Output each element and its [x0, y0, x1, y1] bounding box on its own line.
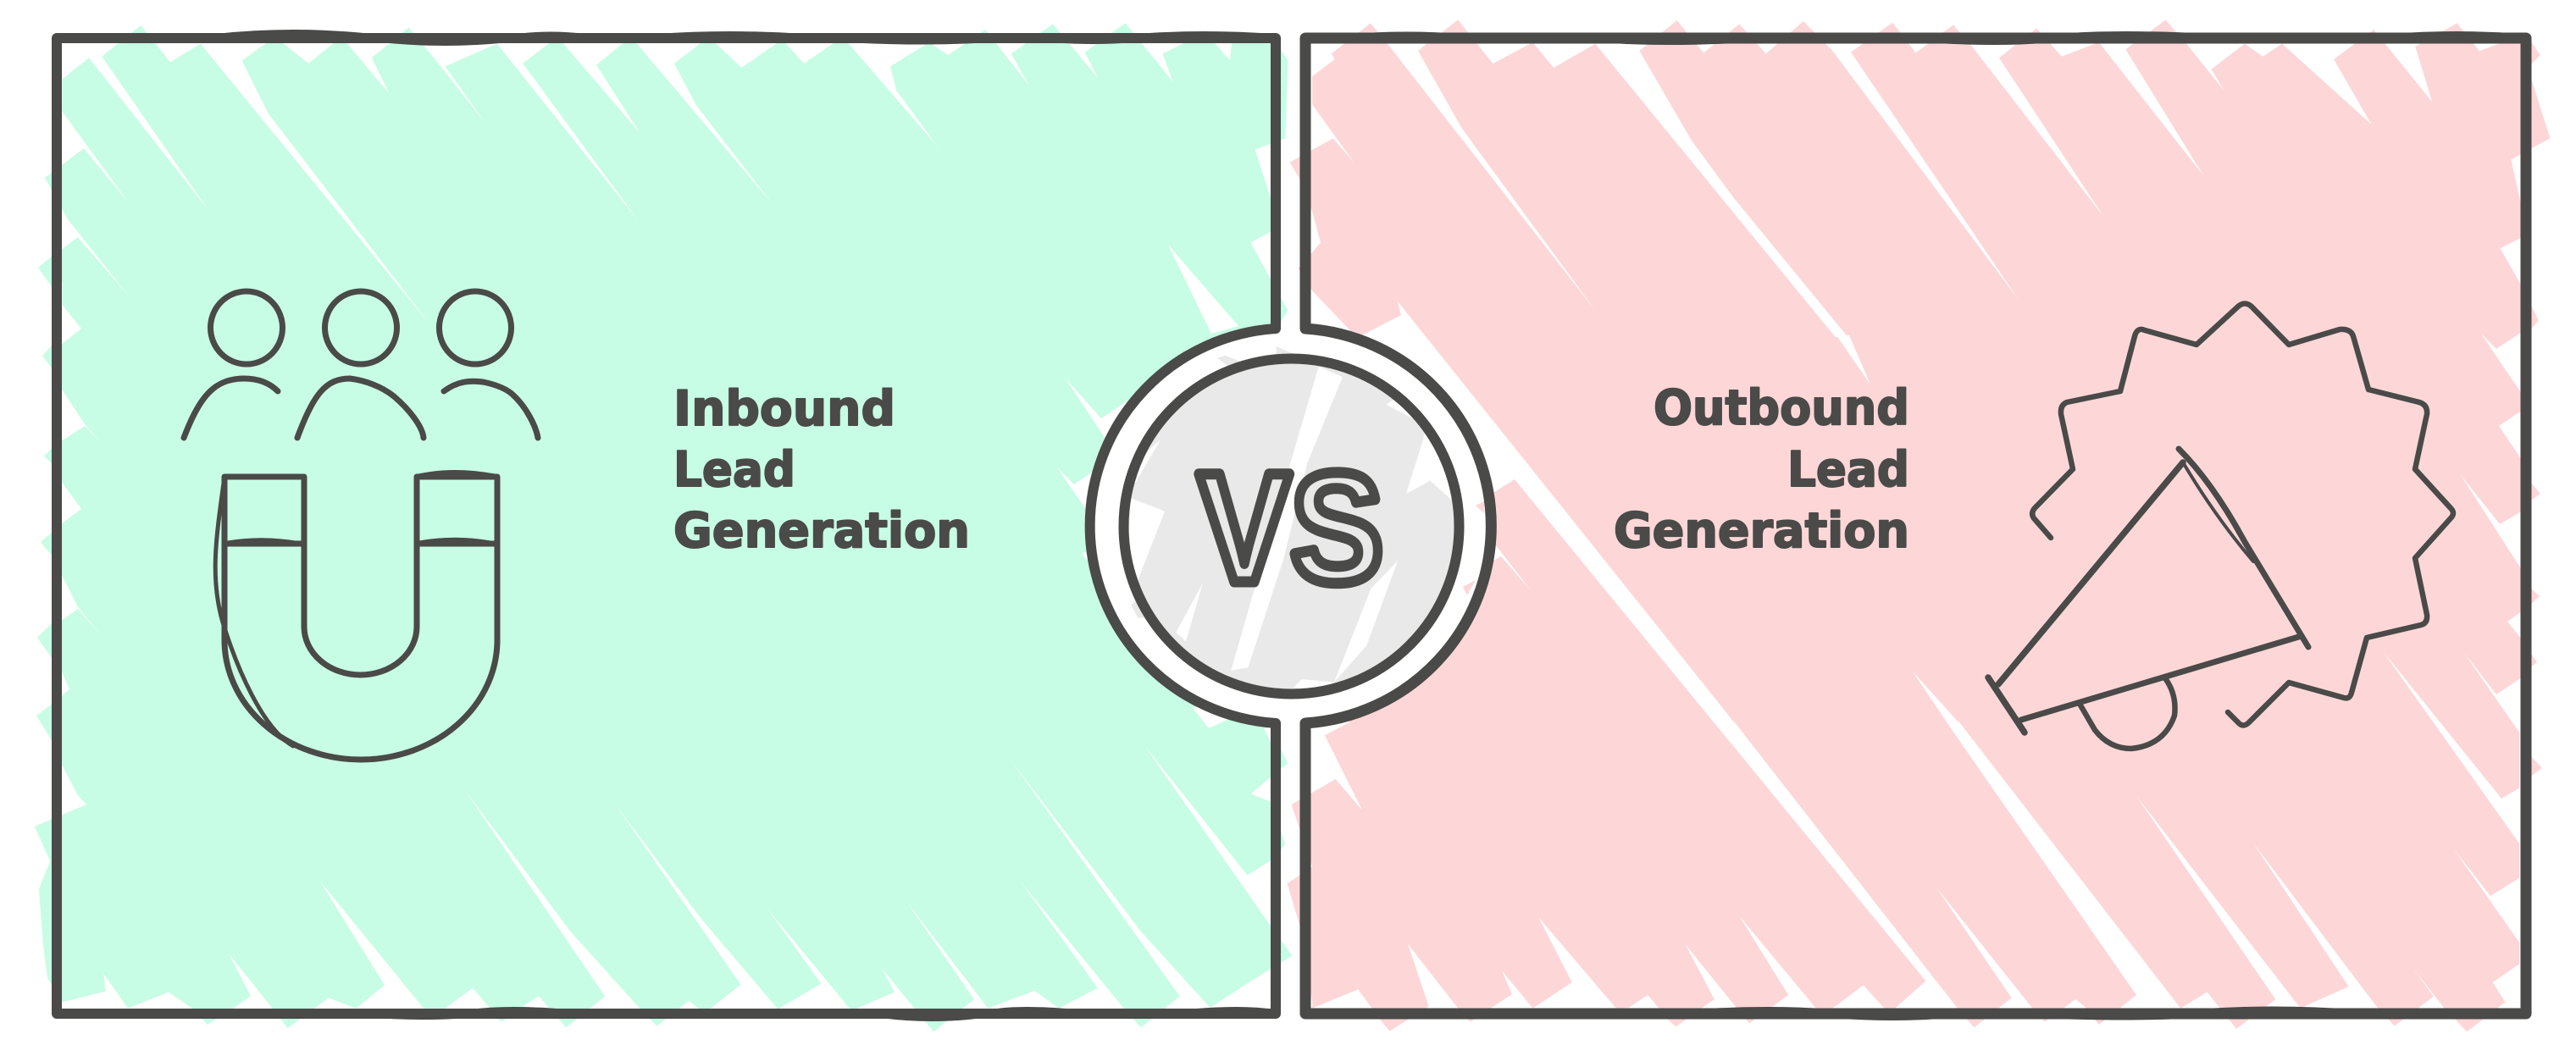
VS badge background: [1093, 328, 1489, 724]
outside spikes on the right edge: [2529, 481, 2542, 777]
text: inbound label: Lead: [673, 442, 795, 498]
icon: megaphone with burst: [1988, 303, 2453, 749]
VS badge ring: [1123, 359, 1459, 694]
frame: outbound panel: [1305, 38, 2526, 1014]
panel: inbound hachure fill: [35, 23, 1292, 1031]
icon: three people: [184, 291, 538, 438]
cone: [1998, 462, 2183, 684]
person 1: [184, 291, 283, 438]
panel: outbound hachure fill: [1288, 19, 2551, 1031]
text: inbound label: Generation: [673, 503, 970, 559]
text: outbound label: Lead: [1787, 442, 1909, 498]
text: inbound label: Inbound: [673, 381, 895, 437]
text: outbound label: [1614, 380, 1909, 559]
burst outline: [2032, 303, 2453, 725]
text: VS: VS: [1198, 441, 1383, 616]
white gaps in the hachure: [61, 245, 1271, 742]
text: outbound label: Generation: [1614, 503, 1909, 559]
person 3: [439, 291, 538, 438]
text: inbound label: [673, 381, 970, 559]
frame: inbound panel: [57, 38, 1276, 1014]
white gaps in the outbound hachure: [1355, 301, 2522, 946]
person 2: [297, 291, 424, 438]
icon: horseshoe magnet: [215, 471, 497, 760]
outside spikes on the left edge: [36, 256, 53, 742]
text: outbound label: Outbound: [1654, 380, 1909, 436]
handle: [2080, 678, 2175, 749]
